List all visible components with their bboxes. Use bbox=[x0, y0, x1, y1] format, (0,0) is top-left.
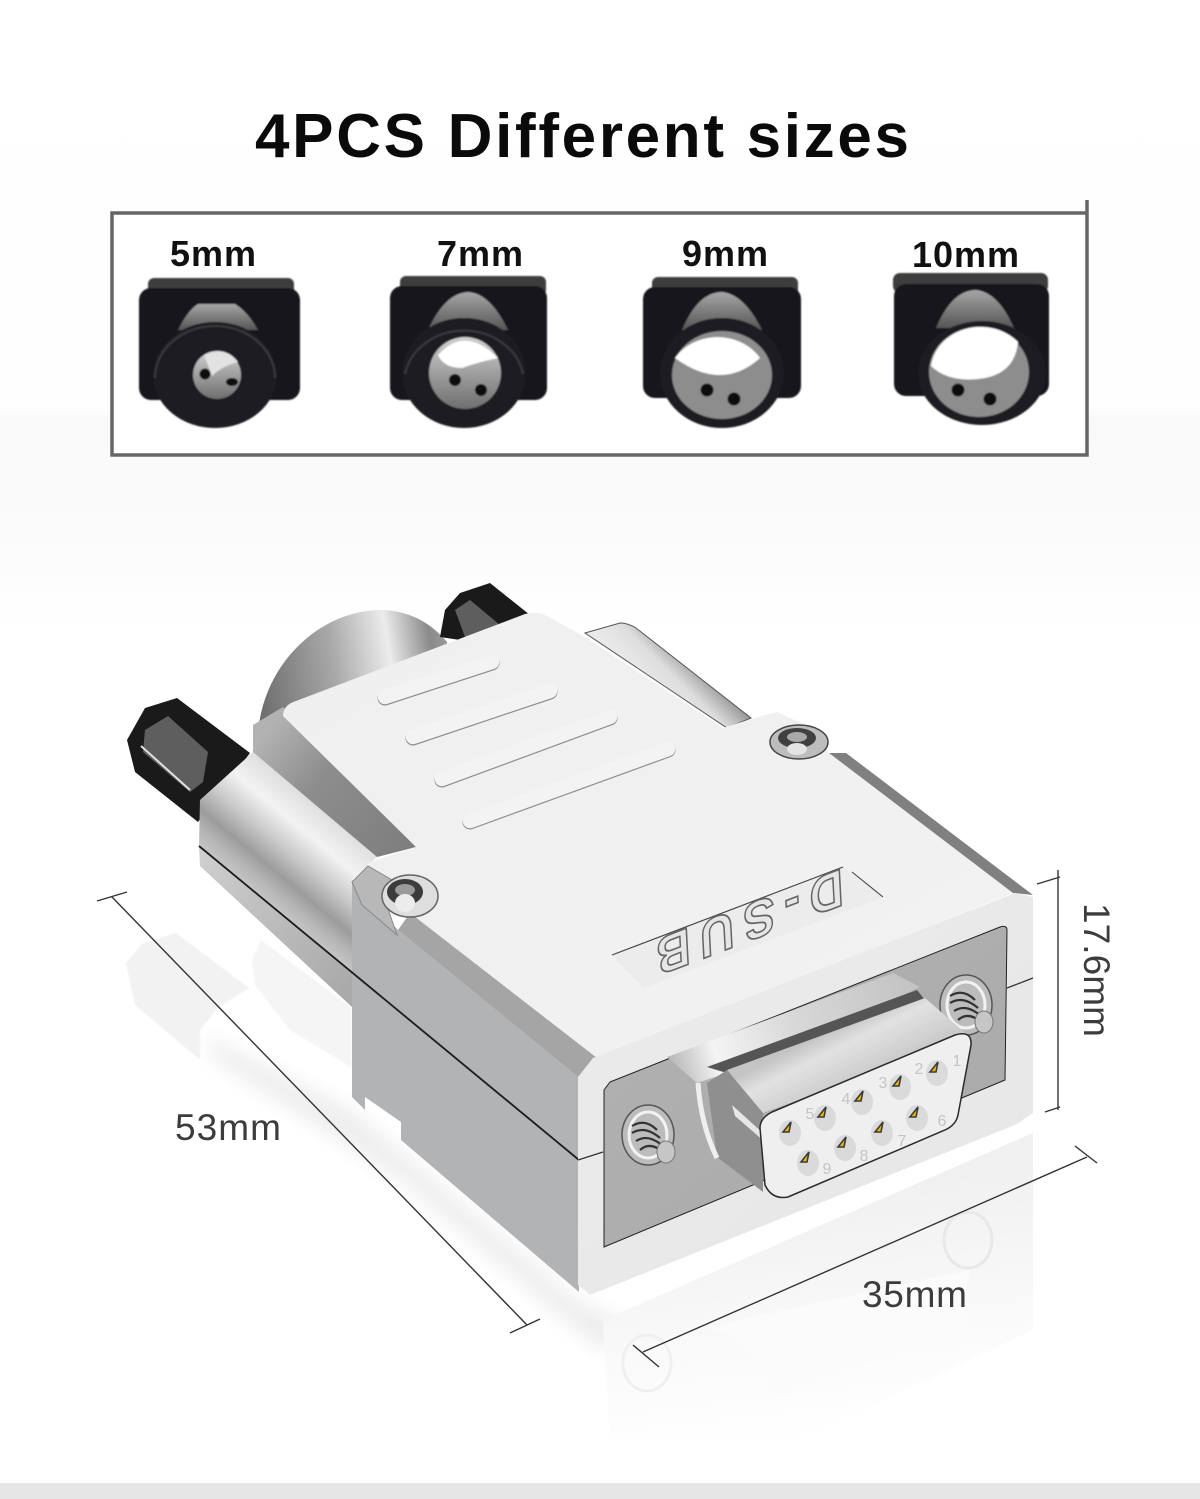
corner screw: right bbox=[770, 725, 828, 759]
pin numbers: 1 bbox=[953, 1053, 962, 1070]
ghost shell bbox=[707, 1270, 970, 1400]
bottom strip bbox=[0, 1483, 1200, 1499]
left dark bevel bbox=[253, 707, 416, 857]
ribs on top face bbox=[385, 662, 668, 822]
pin numbers: 9 bbox=[823, 1161, 832, 1178]
dimension: 35mm bbox=[633, 1146, 1097, 1367]
ghost thumbscrew bbox=[126, 933, 249, 1060]
pin numbers: 7 bbox=[898, 1133, 907, 1150]
lower side band bbox=[199, 846, 352, 1007]
title: 4PCS Different sizes bbox=[255, 102, 909, 171]
D-shell flange bbox=[667, 973, 920, 1083]
pin numbers: 8 bbox=[860, 1148, 869, 1165]
bushing: 10mm bbox=[893, 234, 1049, 425]
grommet 5mm shape bbox=[139, 278, 300, 428]
ghost screw left bbox=[623, 1335, 671, 1391]
grommet 9mm shape bbox=[643, 277, 801, 428]
pin numbers: 2 bbox=[915, 1061, 924, 1078]
D-SUB connector illustration bbox=[127, 583, 1033, 1295]
D-shell side highlight bbox=[732, 1105, 765, 1142]
side seam bbox=[199, 846, 579, 1160]
ghost body bbox=[252, 940, 351, 1067]
bushing: 5mm bbox=[139, 233, 300, 428]
soft ground shadow bbox=[205, 1035, 640, 1350]
top face bbox=[283, 613, 1013, 1060]
label: 53mm: 53mm bbox=[175, 1107, 281, 1148]
D-shell side bbox=[707, 1070, 763, 1192]
grommet 7mm shape bbox=[390, 276, 547, 428]
pin numbers: 5 bbox=[806, 1106, 815, 1123]
label: 9mm: 9mm bbox=[682, 233, 768, 274]
panel frame bbox=[112, 200, 1087, 455]
D-SUB nameplate bbox=[612, 857, 883, 988]
D-shell shadow band bbox=[707, 990, 925, 1074]
label: 7mm: 7mm bbox=[437, 233, 523, 274]
label: 17.6mm: 17.6mm bbox=[1076, 903, 1117, 1037]
shell bright rim bbox=[698, 1083, 717, 1158]
embossed text: D-SUB bbox=[655, 857, 845, 987]
front inner panel bbox=[604, 926, 1007, 1247]
ghost front bezel bbox=[603, 1133, 1033, 1440]
screw post: right bbox=[940, 975, 993, 1035]
bevel strip: front right bbox=[829, 753, 1033, 895]
rib 3 bbox=[442, 717, 610, 780]
rib 1 bbox=[385, 662, 492, 698]
ghost screw right bbox=[944, 1212, 992, 1268]
label: 5mm: 5mm bbox=[170, 233, 256, 274]
cylindrical side bbox=[199, 752, 377, 972]
side wall bbox=[352, 880, 579, 1292]
D-shell face bbox=[760, 1034, 971, 1198]
pin numbers: 3 bbox=[879, 1075, 888, 1092]
pin numbers bbox=[806, 1053, 962, 1178]
dimension: 17.6mm bbox=[1037, 870, 1117, 1112]
pin numbers: 6 bbox=[938, 1113, 947, 1130]
front bezel bbox=[578, 893, 1033, 1295]
thumbscrew: right bbox=[440, 583, 530, 640]
label: 10mm: 10mm bbox=[912, 234, 1019, 275]
screw post: left bbox=[622, 1105, 675, 1165]
D-shell top surface bbox=[727, 998, 970, 1113]
pins bbox=[779, 1060, 948, 1176]
pin numbers: 4 bbox=[842, 1091, 851, 1108]
rear cable dome bbox=[258, 610, 447, 735]
panel: bushing sizes bbox=[112, 200, 1087, 455]
front seam lines bbox=[578, 978, 1033, 1160]
corner screw: left bbox=[352, 866, 438, 935]
rib 4 bbox=[470, 749, 668, 822]
label: 35mm: 35mm bbox=[862, 1274, 967, 1315]
bushing: 9mm bbox=[643, 233, 801, 428]
rear shoulder bbox=[585, 623, 751, 728]
bevel strip: front left bbox=[398, 913, 597, 1077]
dimension: 53mm bbox=[97, 892, 540, 1333]
rib 2 bbox=[413, 691, 550, 738]
thumbscrew: left bbox=[127, 698, 250, 822]
grommet 10mm shape bbox=[893, 273, 1049, 425]
bushing: 7mm bbox=[390, 233, 547, 428]
connector reflection bbox=[126, 933, 1033, 1440]
